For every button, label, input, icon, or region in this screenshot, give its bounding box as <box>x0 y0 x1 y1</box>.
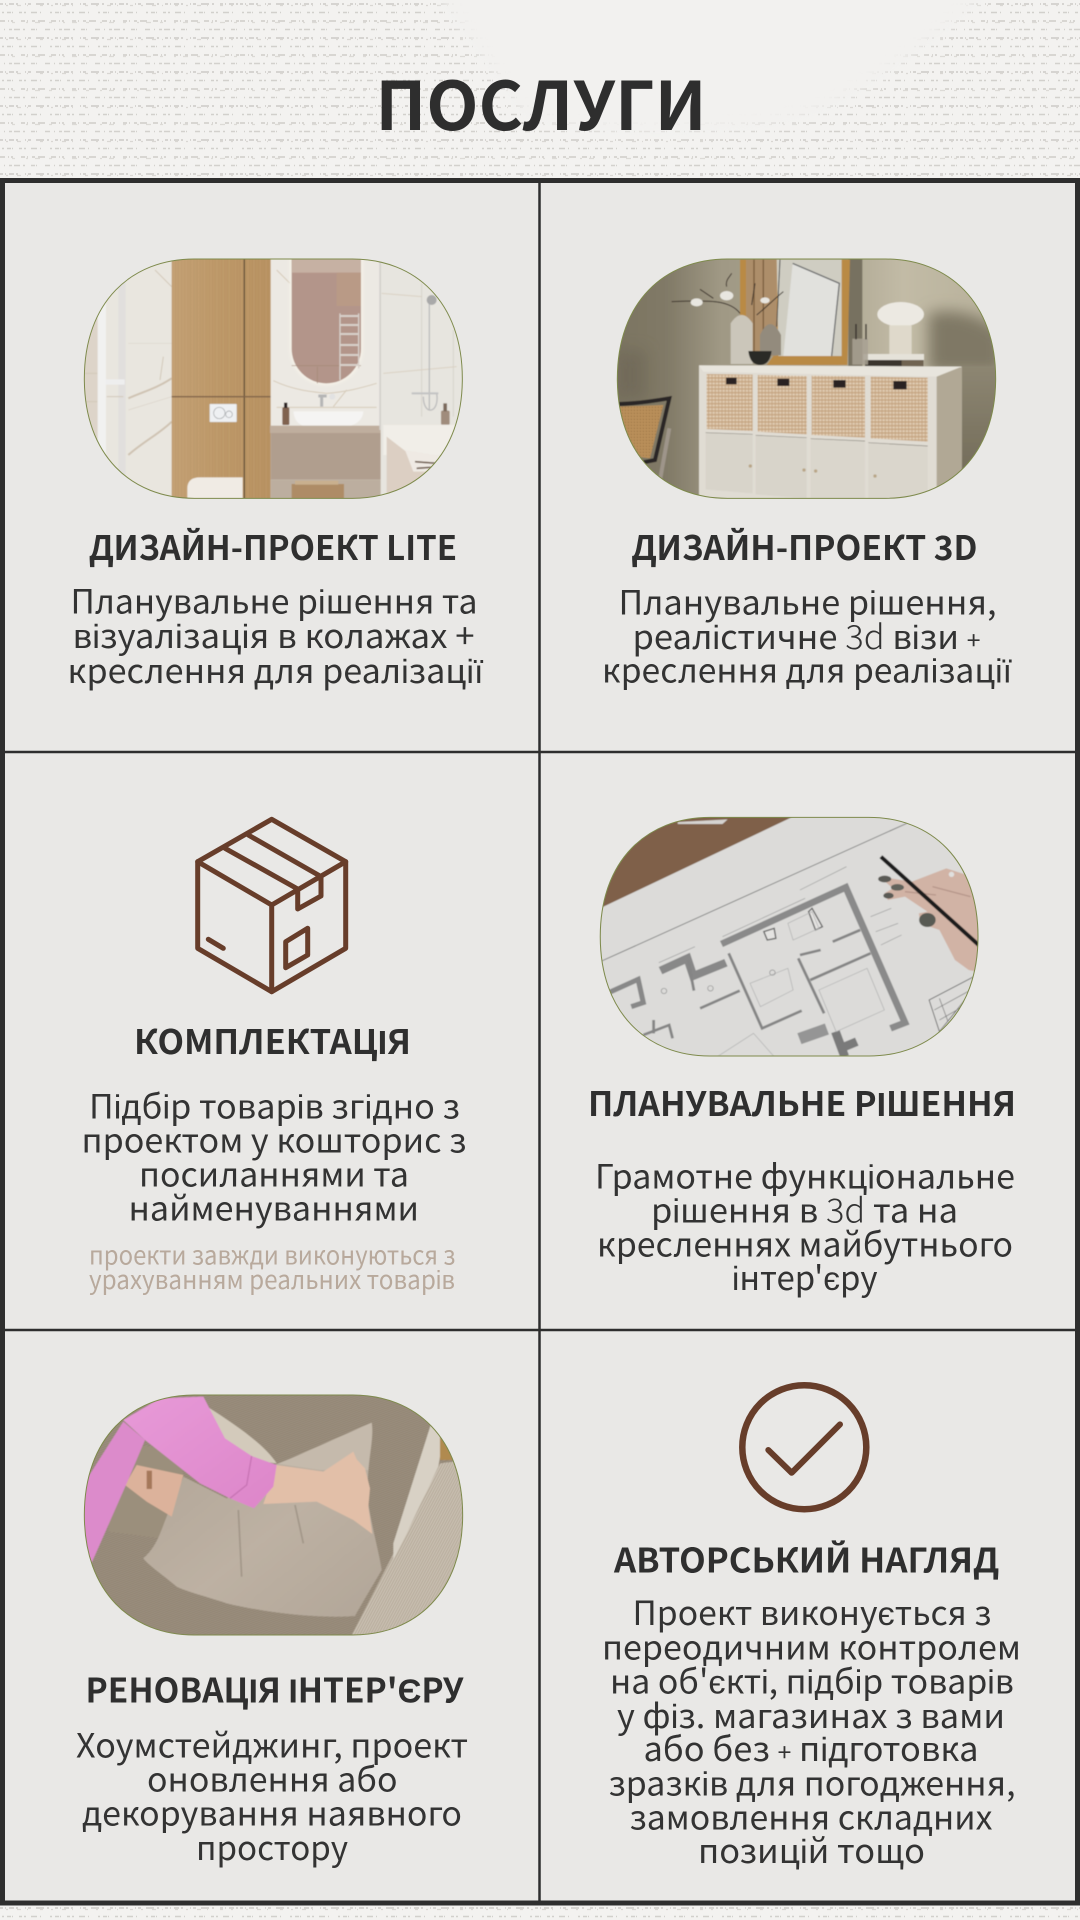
description: креслення для реалізації <box>68 644 483 693</box>
panel: планувальне рішення <box>540 752 1075 1330</box>
description: рішення в 3d та на <box>651 1184 958 1233</box>
description: проектом у кошторис з <box>82 1114 467 1163</box>
heading: АВТОРСЬКИЙ НАГЛЯД <box>613 1534 999 1583</box>
panel: реновація інтер'єру <box>5 1330 540 1901</box>
description: інтер'єру <box>732 1251 878 1300</box>
heading: ДИЗАЙН-ПРОЕКТ 3D <box>632 521 978 570</box>
note: проекти завжди виконуються з <box>89 1235 456 1272</box>
photo: cabinet with decor <box>613 257 1003 503</box>
description <box>82 1079 467 1231</box>
description <box>76 1719 468 1870</box>
note: урахуванням реальних товарів <box>89 1260 455 1297</box>
panel: комплектація <box>5 752 540 1330</box>
heading: ПЛАНУВАЛЬНЕ РІШЕННЯ <box>588 1077 1016 1126</box>
panel: дизайн-проект 3d <box>540 183 1075 752</box>
description: у фіз. магазинах з вами <box>617 1689 1005 1738</box>
icon: cardboard box <box>198 819 346 992</box>
description <box>68 574 483 693</box>
description: посиланнями та <box>139 1148 409 1197</box>
description: реалістичне 3d візи + <box>632 610 980 659</box>
photo: floor plan with hand <box>595 813 984 1060</box>
panel: дизайн-проект lite <box>5 183 540 752</box>
description: Хоумстейджинг, проект <box>76 1719 468 1768</box>
title: ПОСЛУГИ <box>376 53 706 150</box>
description: кресленнях майбутнього <box>597 1218 1013 1267</box>
description: Проект виконується з <box>632 1586 992 1635</box>
description <box>595 1149 1015 1300</box>
description: переодичним контролем <box>602 1620 1021 1669</box>
icon: check mark in circle <box>742 1385 866 1509</box>
description: замовлення складних <box>630 1790 993 1840</box>
description: Планувальне рішення, <box>618 575 996 624</box>
photo: hands arranging a pillow <box>80 1390 467 1640</box>
description: позицій тощо <box>698 1824 925 1873</box>
description: візуалізація в колажах + <box>72 609 474 658</box>
heading: ДИЗАЙН-ПРОЕКТ LITE <box>89 521 457 570</box>
description: зразків для погодження, <box>608 1756 1016 1806</box>
description <box>602 1586 1021 1873</box>
description: Підбір товарів згідно з <box>89 1079 460 1128</box>
description <box>602 575 1012 692</box>
description: Грамотне функціональне <box>595 1149 1015 1198</box>
description: або без + підготовка <box>644 1722 978 1771</box>
photo: bathroom <box>80 257 464 502</box>
description: найменуваннями <box>128 1182 419 1231</box>
description: декорування наявного <box>82 1787 462 1836</box>
description: простору <box>196 1821 348 1870</box>
panel: авторський нагляд <box>540 1330 1075 1901</box>
heading: РЕНОВАЦІЯ ІНТЕР'ЄРУ <box>86 1664 464 1713</box>
note <box>89 1235 456 1297</box>
heading: КОМПЛЕКТАЦІЯ <box>134 1015 411 1064</box>
description: оновлення або <box>147 1753 398 1802</box>
description: креслення для реалізації <box>602 643 1012 692</box>
description: на об'єкті, підбір товарів <box>610 1654 1014 1703</box>
description: Планувальне рішення та <box>70 574 478 623</box>
